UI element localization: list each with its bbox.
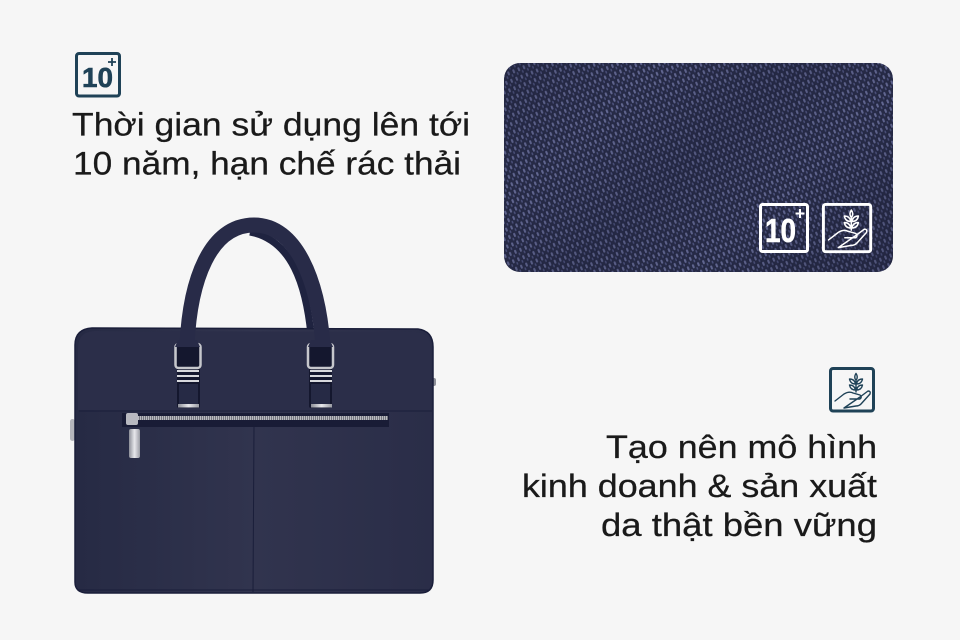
icon: plant in hand (white) <box>823 204 871 252</box>
back handle <box>250 232 311 335</box>
panel: leather texture swatch <box>504 63 893 272</box>
front handle <box>187 225 323 345</box>
text block: sustainable business model: da thật bền vững <box>601 507 877 543</box>
text block: service life: 10 năm, hạn chế rác thải <box>73 146 461 182</box>
bag body <box>75 328 433 593</box>
seam lines <box>78 411 432 592</box>
text block: service life: Thời gian sử dụng lên tới <box>72 106 470 142</box>
icon: 10+ years (dark): 10 <box>82 62 113 93</box>
icon: plant in hand (dark) <box>830 368 874 411</box>
top flap <box>78 331 431 410</box>
right buckle and strap <box>308 340 333 408</box>
icon: 10+ years (dark) <box>76 54 120 96</box>
icon: 10+ years (white): 10 <box>765 212 796 249</box>
text block: sustainable business model: kinh doanh & sản xuất <box>522 468 877 504</box>
icon: 10+ years (white) <box>760 204 808 252</box>
front zipper <box>122 413 389 458</box>
product: navy briefcase <box>70 225 436 593</box>
left buckle and strap <box>175 340 200 408</box>
text block: sustainable business model: Tạo nên mô hình <box>606 429 877 465</box>
text block: service life <box>72 106 470 182</box>
text block: sustainable business model <box>522 429 877 543</box>
side hardware <box>70 378 436 441</box>
